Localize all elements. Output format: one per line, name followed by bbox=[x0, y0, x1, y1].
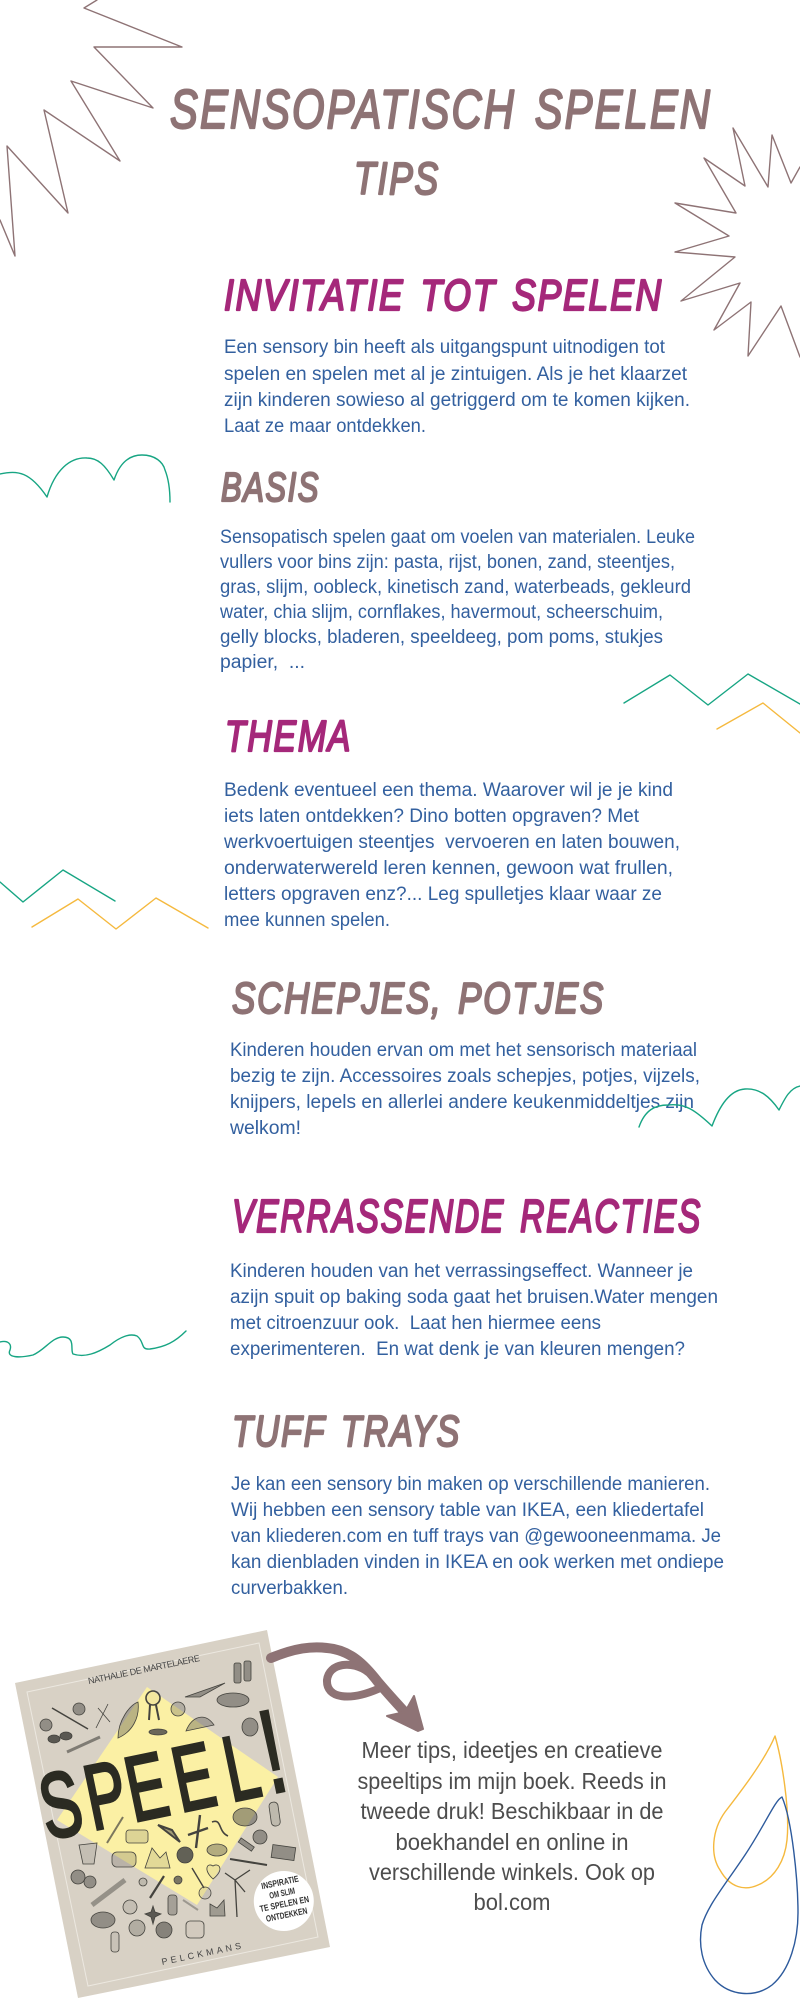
text block: thema: onderwaterwereld leren kennen, gewoon wat frullen, bbox=[224, 858, 673, 879]
title: TIPS bbox=[354, 153, 440, 204]
caption: book text bbox=[358, 1737, 666, 1915]
text block: tuff trays: Je kan een sensory bin maken op verschillende manieren. bbox=[231, 1474, 710, 1495]
text block: thema bbox=[223, 780, 680, 931]
text block: basis: water, chia slijm, cornflakes, havermout, scheerschuim, bbox=[219, 602, 663, 623]
badge: OM SLIM bbox=[268, 1886, 296, 1901]
book inner border bbox=[27, 1643, 318, 1986]
panel: thema bbox=[223, 712, 680, 931]
decoration: green bumps left bbox=[0, 455, 170, 502]
book publisher: PELCKMANS bbox=[161, 1941, 242, 1967]
caption: book text: bol.com bbox=[474, 1889, 550, 1915]
panel: schepjes, potjes bbox=[229, 974, 700, 1139]
text block: schepjes: welkom! bbox=[229, 1118, 301, 1139]
yellow diamond bbox=[57, 1687, 278, 1905]
text block: invitatie: Laat ze maar ontdekken. bbox=[224, 416, 426, 437]
text block: schepjes: Kinderen houden ervan om met het sensorisch materiaal bbox=[230, 1040, 697, 1061]
book text (rotated) bbox=[17, 1640, 321, 1985]
panel: basis bbox=[219, 464, 695, 673]
decoration: green bumps right bbox=[639, 1086, 800, 1127]
decoration: green zigzag left bbox=[0, 870, 115, 902]
text block: tuff trays: kan dienbladen vinden in IKEA en ook werken met ondiepe bbox=[231, 1552, 724, 1573]
panel: verrassende reacties bbox=[230, 1190, 718, 1360]
heading: thema: THEMA bbox=[225, 712, 352, 761]
decoration: green wave left bbox=[0, 1331, 186, 1357]
text block: basis: vullers voor bins zijn: pasta, rijst, bonen, zand, steentjes, bbox=[220, 552, 675, 573]
decoration: blue drop bbox=[701, 1797, 798, 1994]
text block: verrassende reacties: azijn spuit op baking soda gaat het bruisen.Water mengen bbox=[230, 1287, 718, 1308]
text block: basis: papier, ... bbox=[220, 652, 305, 673]
caption: book text: speeltips im mijn boek. Reeds in bbox=[358, 1768, 666, 1794]
caption: book text: boekhandel en online in bbox=[396, 1829, 628, 1855]
text block: thema: letters opgraven enz?... Leg spulletjes klaar waar ze bbox=[224, 884, 662, 905]
text block: basis: gelly blocks, bladeren, speeldeeg, pom poms, stukjes bbox=[220, 627, 663, 648]
decoration: yellow drop bbox=[714, 1736, 788, 1888]
decoration: top-left spiky star bbox=[0, 0, 182, 256]
text block: schepjes: bezig te zijn. Accessoires zoals schepjes, potjes, vijzels, bbox=[230, 1066, 700, 1087]
heading: schepjes, potjes: SCHEPJES, POTJES bbox=[232, 974, 605, 1023]
caption: book text: verschillende winkels. Ook op bbox=[369, 1859, 655, 1885]
decoration: yellow zigzag right bbox=[717, 703, 800, 733]
arrow: curly arrow to caption bbox=[271, 1647, 423, 1731]
panel: invitatie tot spelen bbox=[224, 271, 690, 437]
text block: thema: Bedenk eventueel een thema. Waarover wil je je kind bbox=[224, 780, 673, 801]
caption: book text: Meer tips, ideetjes en creatieve bbox=[362, 1737, 662, 1763]
text block: invitatie: Een sensory bin heeft als uitgangspunt uitnodigen tot bbox=[224, 337, 666, 358]
text block: invitatie: spelen en spelen met al je zintuigen. Als je het klaarzet bbox=[224, 364, 688, 385]
text block: thema: iets laten ontdekken? Dino botten opgraven? Met bbox=[224, 806, 640, 827]
decoration: green zigzag right bbox=[624, 674, 800, 705]
text block: schepjes bbox=[229, 1040, 700, 1139]
title bbox=[170, 78, 712, 204]
heading: basis: BASIS bbox=[221, 464, 320, 510]
book cover: SPEEL! bbox=[15, 1630, 330, 1998]
text block: invitatie bbox=[224, 337, 690, 437]
text block: tuff trays: Wij hebben een sensory table van IKEA, een kliedertafel bbox=[231, 1500, 704, 1521]
heading: invitatie tot spelen: INVITATIE TOT SPELEN bbox=[224, 271, 663, 320]
text block: thema: mee kunnen spelen. bbox=[224, 910, 390, 931]
text block: schepjes: knijpers, lepels en allerlei andere keukenmiddeltjes zijn bbox=[230, 1092, 694, 1113]
text block: tuff trays: curverbakken. bbox=[231, 1578, 348, 1599]
book cover background bbox=[15, 1630, 330, 1998]
book doodles bbox=[40, 1661, 296, 1952]
text block: basis: Sensopatisch spelen gaat om voelen van materialen. Leuke bbox=[220, 527, 695, 548]
text block: tuff trays: van kliederen.com en tuff trays van @gewooneenmama. Je bbox=[231, 1526, 721, 1547]
badge: ONTDEKKEN bbox=[265, 1906, 308, 1924]
panel: tuff trays bbox=[231, 1407, 724, 1599]
text block: verrassende reacties: Kinderen houden van het verrassingseffect. Wanneer je bbox=[230, 1261, 693, 1282]
text block: basis bbox=[219, 527, 695, 673]
badge bbox=[248, 1866, 319, 1936]
badge: INSPIRATIE bbox=[260, 1874, 300, 1891]
heading: tuff trays: TUFF TRAYS bbox=[232, 1407, 461, 1456]
decoration: yellow zigzag left bbox=[32, 898, 208, 929]
text block: thema: werkvoertuigen steentjes vervoeren en laten bouwen, bbox=[223, 832, 680, 853]
book big title: SPEEL! bbox=[26, 1686, 296, 1865]
text block: invitatie: zijn kinderen sowieso al getriggerd om te komen kijken. bbox=[224, 390, 690, 411]
text block: verrassende reacties bbox=[230, 1261, 718, 1360]
text block: tuff trays bbox=[231, 1474, 724, 1599]
decoration: right spiky star bbox=[675, 128, 800, 357]
book author: NATHALIE DE MARTELAERE bbox=[87, 1653, 201, 1686]
text block: basis: gras, slijm, oobleck, kinetisch zand, waterbeads, gekleurd bbox=[220, 577, 691, 598]
badge: TE SPELEN EN bbox=[259, 1894, 310, 1914]
text block: verrassende reacties: met citroenzuur ook. Laat hen hiermee eens bbox=[230, 1313, 601, 1334]
text block: verrassende reacties: experimenteren. En wat denk je van kleuren mengen? bbox=[230, 1339, 685, 1360]
caption: book text: tweede druk! Beschikbaar in de bbox=[360, 1798, 664, 1824]
